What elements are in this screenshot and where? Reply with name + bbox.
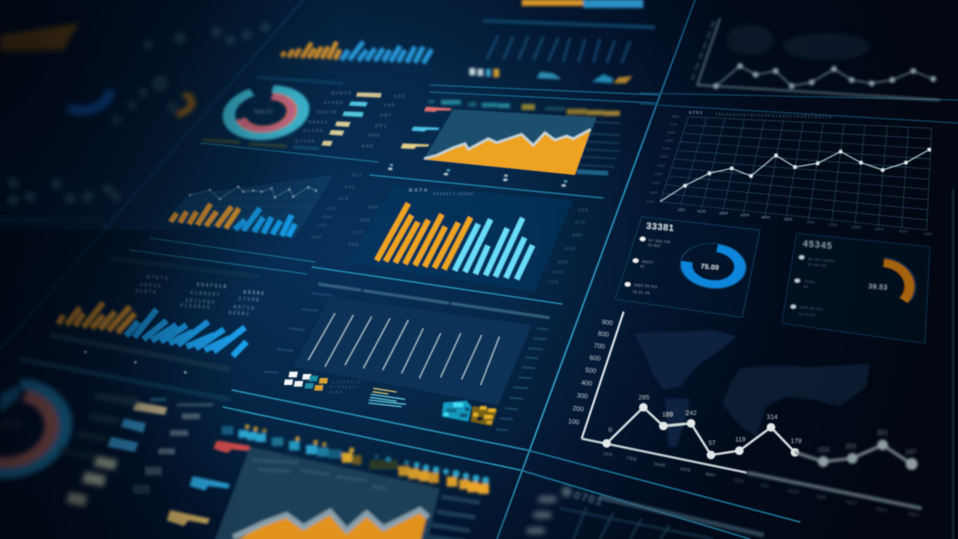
data title: DATA	[409, 188, 429, 193]
digit rows: 891	[375, 123, 387, 129]
side scale digits: 418	[565, 246, 576, 251]
y labels: 0300	[660, 155, 668, 159]
legend squares	[284, 372, 328, 391]
y labels: 600	[589, 355, 601, 363]
panel: big bottom-left donut	[0, 359, 91, 498]
side scale digits: 590	[348, 242, 359, 247]
orange area	[424, 130, 591, 175]
donut value: 39.53	[868, 283, 888, 292]
digit rows: 86412	[308, 119, 329, 125]
grey trend line	[233, 510, 428, 537]
month labels near: MAY	[705, 471, 717, 478]
panel: bottom right grid chart	[560, 490, 763, 539]
month labels of grid chart: AUG	[697, 209, 707, 214]
footer band	[50, 335, 230, 369]
side scale digits: 745	[548, 279, 559, 284]
white trend line	[424, 129, 591, 159]
month labels: APR	[741, 214, 749, 218]
side scale digits: 642	[345, 184, 356, 189]
digit rows	[135, 274, 266, 318]
y labels: 700	[593, 343, 606, 351]
y labels: 0500	[665, 139, 673, 143]
dim side digits: 246	[312, 234, 322, 239]
panel: bottom-left list pills	[60, 393, 250, 526]
side scale digits: 612	[553, 269, 564, 274]
card frame	[782, 233, 930, 343]
month labels near: JAN	[602, 451, 613, 457]
y labels	[647, 114, 680, 203]
legend strip	[203, 140, 320, 149]
plot backdrop	[348, 185, 573, 292]
grey dots	[8, 23, 270, 205]
small heatmap	[592, 74, 633, 83]
digit rows: 123	[393, 93, 406, 99]
month labels near: MAR	[654, 461, 666, 468]
y labels: 0200	[657, 163, 665, 167]
digit rows: 648	[362, 143, 374, 149]
pills	[321, 92, 382, 146]
dim side digits: 789	[317, 223, 327, 228]
side text rows	[263, 293, 548, 430]
donut value: 556.07	[254, 109, 273, 115]
panel: main area chart	[388, 100, 620, 187]
card title: 33381	[646, 221, 675, 233]
month labels far: SEP	[816, 494, 828, 502]
near pills	[107, 402, 167, 452]
heatmap	[442, 401, 497, 426]
panel: top donut	[203, 77, 343, 149]
header band	[483, 21, 655, 27]
month labels: FEB	[697, 210, 706, 214]
legend tags	[401, 107, 452, 149]
panel: main bar chart	[338, 173, 589, 292]
blurred far-left widgets	[0, 23, 270, 227]
values near	[608, 395, 802, 447]
bullet text: 58 454 50	[807, 262, 827, 268]
y ticks	[692, 21, 714, 80]
bullet text: 30 807	[648, 243, 661, 248]
digit rows: 87673	[332, 90, 352, 96]
small digit grid: 87654321	[330, 384, 360, 389]
digit rows: 92581	[228, 310, 251, 318]
bullet text: 86571	[642, 260, 654, 265]
panel: bottom-left text rows	[20, 258, 266, 398]
digit rows: 46520	[140, 282, 162, 290]
axes	[697, 18, 940, 100]
digit rows: 87673	[147, 274, 169, 282]
values near: 242	[686, 410, 697, 417]
far pills	[60, 393, 140, 507]
bullet text: 0856 29 351	[799, 305, 823, 311]
right text rows	[427, 497, 480, 539]
bullet text: 01	[640, 264, 645, 269]
status dots	[245, 424, 489, 484]
status squares row	[428, 100, 620, 116]
digit rows: 367	[380, 113, 392, 119]
y labels: 400	[581, 380, 593, 388]
status squares row	[222, 426, 489, 494]
header band	[110, 258, 260, 277]
digit rows: 502	[368, 133, 381, 139]
dim side digits	[312, 206, 337, 239]
chart title: 0701	[573, 490, 604, 508]
month labels: MAY	[762, 216, 771, 220]
month labels: JAN	[677, 208, 685, 212]
panel: bottom area chart	[213, 424, 489, 539]
dim side digits: 456	[322, 214, 332, 219]
y labels: 200	[572, 405, 584, 413]
values far: 147	[905, 449, 917, 456]
month labels far: JUL	[760, 482, 770, 490]
plot backdrop	[293, 297, 532, 405]
month labels near: APR	[680, 466, 691, 473]
dim side digits: 123	[327, 206, 337, 211]
donut chart	[217, 78, 315, 147]
y labels: 0400	[663, 147, 671, 151]
panel: bottom-left bar chart	[58, 303, 247, 356]
month labels of grid chart: APR	[875, 227, 884, 232]
y labels: 300	[576, 392, 589, 400]
dots	[84, 351, 187, 374]
values far	[818, 430, 917, 456]
band	[257, 77, 343, 83]
month labels: JUN	[784, 218, 792, 222]
month labels of grid chart: DEC	[784, 217, 793, 222]
side scale digits: 871	[352, 173, 362, 178]
x axis	[582, 439, 747, 473]
donut value: 75.00	[700, 263, 719, 272]
month labels of grid chart: JUN	[923, 231, 932, 236]
world map	[633, 330, 870, 447]
digit rows: 4186237	[190, 290, 221, 298]
trend line	[660, 150, 929, 202]
month labels of grid chart: NOV	[762, 215, 771, 220]
blue donut arc	[68, 90, 111, 111]
month labels far	[733, 477, 920, 519]
bullet text	[798, 257, 835, 317]
x axis far	[747, 473, 922, 508]
chart backdrop	[167, 175, 333, 238]
digit rows: 8152643	[180, 303, 211, 311]
month labels near	[602, 451, 717, 478]
subtitle: 0789417 00000	[433, 191, 474, 196]
donut	[0, 359, 91, 498]
footer legend chips	[388, 164, 567, 187]
grid	[560, 507, 713, 539]
month labels far: OCT	[846, 500, 858, 508]
trend far	[795, 440, 918, 470]
plot backdrop	[213, 447, 440, 539]
points near	[602, 403, 799, 459]
month labels far: JUN	[733, 477, 745, 485]
grid bands	[172, 197, 320, 217]
plot backdrop	[423, 109, 597, 175]
small cyan bars	[537, 72, 562, 79]
month labels far: NOV	[876, 506, 889, 514]
card frame	[615, 217, 760, 317]
sub heading: T00000000781234567890125463789123	[715, 112, 832, 120]
digit rows: 5547418	[197, 282, 228, 290]
blue cap segment	[0, 385, 20, 413]
side scale digits: 950	[368, 204, 379, 209]
month labels of grid chart: MAR	[852, 224, 861, 229]
digit rows: 30275	[317, 110, 337, 116]
small digit grid	[328, 379, 362, 394]
trend near	[607, 407, 795, 455]
values near: 178	[791, 438, 802, 445]
y labels: 800	[597, 331, 610, 339]
right digit rows	[580, 122, 620, 167]
digit rows: 27196	[238, 296, 261, 304]
underline band	[20, 360, 227, 398]
orange donut arc	[177, 95, 192, 115]
digit rows: 3071962	[185, 298, 216, 306]
chart title: 0701	[689, 110, 703, 115]
blue bars	[235, 208, 295, 237]
orange bars	[58, 303, 135, 333]
bullet text: 58	[803, 285, 808, 289]
month labels	[677, 208, 792, 222]
bullet text: 92 347 45563	[808, 257, 835, 263]
bullet text: 0Y 356 766	[649, 238, 671, 244]
values near: 189	[662, 412, 673, 419]
bottom grid labels	[527, 487, 571, 534]
slanted lines	[308, 313, 499, 385]
donut 75.00	[678, 241, 748, 291]
trend points	[683, 148, 931, 188]
faint world map	[727, 25, 870, 60]
month labels of grid chart: SEP	[719, 211, 728, 216]
card 45345	[782, 233, 930, 343]
header band	[318, 284, 553, 318]
squares legend	[469, 68, 499, 77]
panel: KPI cards and world chart	[568, 207, 932, 519]
column titles	[252, 460, 387, 489]
month labels of grid chart: OCT	[741, 213, 750, 218]
trend line	[716, 66, 933, 86]
value rows	[133, 398, 213, 494]
small digit grid: 2468	[328, 389, 343, 394]
donut 39.53	[845, 255, 918, 317]
y labels: 0100	[653, 181, 661, 185]
side scale digits: 266	[360, 218, 371, 223]
bullet text	[633, 238, 671, 295]
values far: 301	[877, 430, 888, 437]
digit rows: 245	[383, 103, 396, 109]
digit rows: 65382	[243, 289, 266, 297]
left shade	[0, 230, 240, 539]
bullets	[625, 237, 646, 287]
month labels of grid chart: JAN	[807, 219, 815, 224]
month labels far: DEC	[908, 511, 920, 519]
side scale digits: 360	[572, 233, 582, 238]
top bar strip	[522, 0, 643, 8]
y labels: 100	[568, 418, 580, 426]
cyan strip	[577, 169, 608, 176]
month labels of grid chart	[677, 207, 932, 236]
y axis	[582, 312, 624, 439]
red tag	[218, 442, 250, 453]
y labels: 0050	[650, 190, 658, 194]
bullets	[790, 255, 805, 309]
y labels: 0000	[647, 199, 655, 203]
panel: top legend list	[295, 90, 406, 149]
panel: top right line chart	[692, 18, 940, 100]
bullet text: 0890 29 551	[634, 283, 658, 289]
y labels: 0800	[672, 114, 680, 118]
faint slanted bars	[487, 35, 630, 63]
faint lines	[0, 218, 107, 227]
month labels of grid chart: FEB	[828, 222, 837, 227]
panel: grid line chart	[647, 110, 932, 230]
cyan bars	[455, 218, 533, 279]
side scale digits: 137	[353, 230, 364, 235]
line series	[189, 186, 317, 200]
values near: 295	[638, 395, 650, 402]
month labels of grid chart: JUL	[677, 207, 686, 212]
y labels	[568, 319, 614, 426]
bar chart: top small	[282, 42, 432, 63]
values near: 0	[608, 427, 612, 434]
grid	[660, 117, 932, 230]
side scale digits: 318	[338, 196, 349, 201]
values near: 314	[767, 414, 778, 421]
orange area	[233, 512, 427, 539]
month labels near: FEB	[626, 455, 637, 462]
side scale digits: 530	[558, 259, 569, 264]
digit rows	[295, 90, 406, 149]
panel: left combo chart	[167, 175, 337, 239]
orange bar smudge	[0, 23, 78, 52]
digit rows: 97105	[295, 138, 316, 144]
bullet text: 18 21 53	[798, 312, 815, 317]
y labels: 900	[601, 319, 614, 327]
donut value: 355	[0, 417, 21, 431]
digit rows: 31874	[135, 288, 157, 296]
coloured tags	[167, 441, 250, 526]
values near: 119	[735, 437, 746, 444]
bullet text: 18 21 48	[633, 290, 650, 295]
panel: top centre widgets	[469, 0, 655, 83]
month labels far: AUG	[787, 488, 800, 496]
blue bars	[126, 309, 247, 356]
panel: centre vertical lines chart	[263, 284, 553, 430]
sub heading	[600, 497, 763, 535]
orange bars	[171, 204, 239, 228]
side scale digits	[338, 173, 589, 284]
horizontal bars	[368, 388, 406, 407]
digit rows: 47463	[323, 100, 344, 106]
y labels: 0150	[655, 172, 663, 176]
card title: 45345	[802, 239, 833, 251]
bullet text: 76581	[804, 279, 816, 284]
orange bars	[377, 203, 471, 269]
digit rows: 51732	[303, 128, 324, 134]
y labels: 0700	[669, 123, 677, 127]
month labels: MAR	[719, 212, 728, 216]
side scale digits: 125	[578, 208, 589, 213]
values far: 153	[818, 447, 829, 454]
values near: 57	[708, 440, 716, 447]
small digit grid: 12345678	[332, 379, 362, 384]
month labels of grid chart: MAY	[899, 229, 909, 234]
digit rows: 40713	[233, 304, 256, 312]
y labels: 0600	[667, 131, 675, 135]
points	[713, 63, 936, 89]
card 33381	[615, 217, 760, 317]
y labels: 500	[585, 367, 597, 375]
side scale digits: 274	[575, 220, 586, 225]
values far: 202	[845, 444, 857, 451]
